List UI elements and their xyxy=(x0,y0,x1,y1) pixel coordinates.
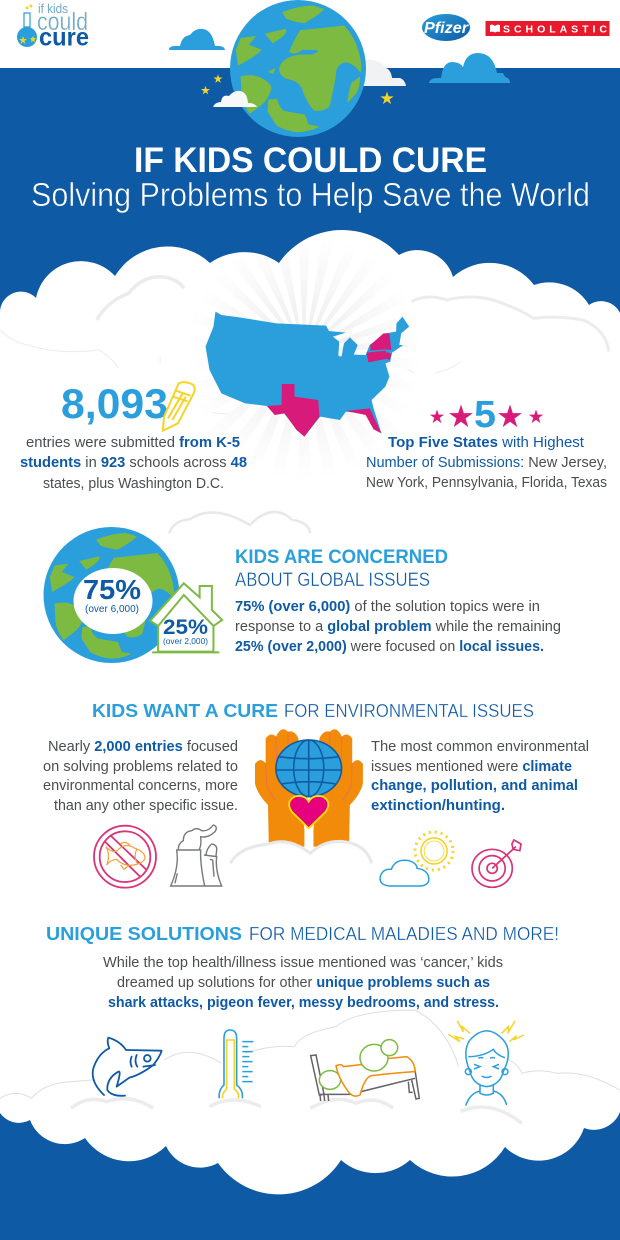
text: entries description xyxy=(20,434,247,492)
state: Pennsylvania xyxy=(366,351,389,362)
icon: 25% house xyxy=(150,583,222,652)
text: entries description: states, plus Washington D.C. xyxy=(43,475,224,492)
Pfizer logo xyxy=(422,14,470,41)
text: unique solutions description: dreamed up solutions for other unique problems such as xyxy=(117,974,490,991)
icon: hands holding globe and heart xyxy=(230,729,372,890)
grey cloud above global section xyxy=(169,512,310,533)
icon: 75% globe xyxy=(44,527,180,663)
heading: environmental issues: KIDS WANT A CURE xyxy=(92,700,278,721)
globe land masses xyxy=(236,6,361,132)
text: environmental right xyxy=(371,738,589,814)
text: unique solutions description: shark attacks, pigeon fever, messy bedrooms, and stress. xyxy=(108,994,499,1011)
blue header background xyxy=(0,68,620,328)
stat: five stars: 5 xyxy=(474,394,496,436)
icon: sun xyxy=(415,832,453,870)
icon: target with arrow xyxy=(472,840,521,887)
text: global issues description xyxy=(235,598,561,655)
US map xyxy=(206,312,409,437)
text: environmental left: environmental concerns, more xyxy=(43,777,238,794)
icon: 25% house: (over 2,000) xyxy=(163,636,208,646)
subtitle: Solving Problems to Help Save the World xyxy=(31,176,590,213)
heading: unique solutions xyxy=(46,923,559,944)
heading: unique solutions: FOR MEDICAL MALADIES AND MORE! xyxy=(249,923,559,944)
icon: 75% globe: (over 6,000) xyxy=(85,603,139,615)
text: unique solutions description: While the top health/illness issue mentioned was ‘cancer,’ kids xyxy=(103,954,503,971)
text: top five states: Number of Submissions: New Jersey, xyxy=(366,454,607,471)
icon: blue cloud right xyxy=(429,53,510,83)
stat: 8,093 entries: 8,093 xyxy=(61,380,168,427)
Scholastic logo: SCHOLASTIC xyxy=(503,24,607,36)
large white cloud top xyxy=(0,230,620,400)
icon: kid with headache xyxy=(448,1021,524,1106)
icon: blue cloud left xyxy=(169,29,225,50)
text: global issues description: 25% (over 2,000) were focused on local issues. xyxy=(235,638,544,655)
icon: messy bed xyxy=(311,1040,419,1101)
icon: shark xyxy=(93,1038,162,1096)
text: entries description: entries were submitted from K-5 xyxy=(26,434,240,451)
state: New York xyxy=(370,333,391,351)
text: environmental right: issues mentioned were climate xyxy=(371,758,572,775)
state: Florida xyxy=(346,408,381,433)
icon: thermometer xyxy=(219,1030,253,1098)
text: environmental right: The most common environmental xyxy=(371,738,589,755)
icon: light cloud behind globe xyxy=(360,60,406,86)
icon: 25% house: 25% xyxy=(163,616,208,639)
header logo: If Kids Could Cure: could xyxy=(37,8,88,36)
globe in hands xyxy=(276,740,342,797)
icon: blue cloud outline xyxy=(380,860,429,886)
icon: power plant xyxy=(171,825,222,886)
header logo: If Kids Could Cure xyxy=(17,2,89,52)
text: environmental left: than any other specific issue. xyxy=(54,797,238,814)
icon: 75% globe: 75% xyxy=(83,574,141,605)
icon: yellow stars xyxy=(201,74,394,104)
icon: pencil xyxy=(163,382,195,431)
heading: kids are concerned: KIDS ARE CONCERNED xyxy=(235,546,448,568)
text: entries description: students in 923 schools across 48 xyxy=(20,454,247,471)
heart xyxy=(289,796,328,828)
Pfizer logo: Pfizer xyxy=(424,20,469,37)
heading: kids are concerned: ABOUT GLOBAL ISSUES xyxy=(235,569,430,591)
text: environmental right: change, pollution, and animal xyxy=(371,777,578,794)
grey cloud outlines inside top cloud xyxy=(0,277,609,414)
stat: five stars xyxy=(430,394,543,436)
text: environmental left: on solving problems related to xyxy=(43,758,238,775)
Scholastic logo xyxy=(486,21,610,36)
header logo: If Kids Could Cure: if kids xyxy=(38,2,68,16)
state: Texas xyxy=(267,384,319,437)
text: environmental right: extinction/hunting. xyxy=(371,797,505,814)
text: global issues description: 75% (over 6,000) of the solution topics were in xyxy=(235,598,540,615)
bottom blue cloud footer xyxy=(0,1112,620,1240)
text: global issues description: response to a global problem while the remaining xyxy=(235,618,561,635)
icon: header globe xyxy=(230,0,366,137)
grey cloud outlines bottom xyxy=(0,1010,620,1123)
heading: kids are concerned xyxy=(235,546,448,591)
text: top five states: Top Five States with Highest xyxy=(388,434,585,451)
text: unique solutions description xyxy=(103,954,503,1011)
heading: environmental issues: FOR ENVIRONMENTAL ISSUES xyxy=(284,700,534,721)
heading: unique solutions: UNIQUE SOLUTIONS xyxy=(46,923,242,944)
icon: white cloud in front of globe xyxy=(213,91,257,107)
text: environmental left: Nearly 2,000 entries focused xyxy=(48,738,238,755)
text: environmental left xyxy=(43,738,238,814)
state: New Jersey xyxy=(387,352,391,361)
title: IF KIDS COULD CURE xyxy=(134,141,487,180)
cloud below hands xyxy=(230,841,372,890)
icon: no fishing xyxy=(94,826,156,888)
sunburst rays behind map xyxy=(202,237,409,428)
text: top five states xyxy=(366,434,607,491)
header logo: If Kids Could Cure: cure xyxy=(39,24,89,52)
heading: environmental issues xyxy=(92,700,534,721)
